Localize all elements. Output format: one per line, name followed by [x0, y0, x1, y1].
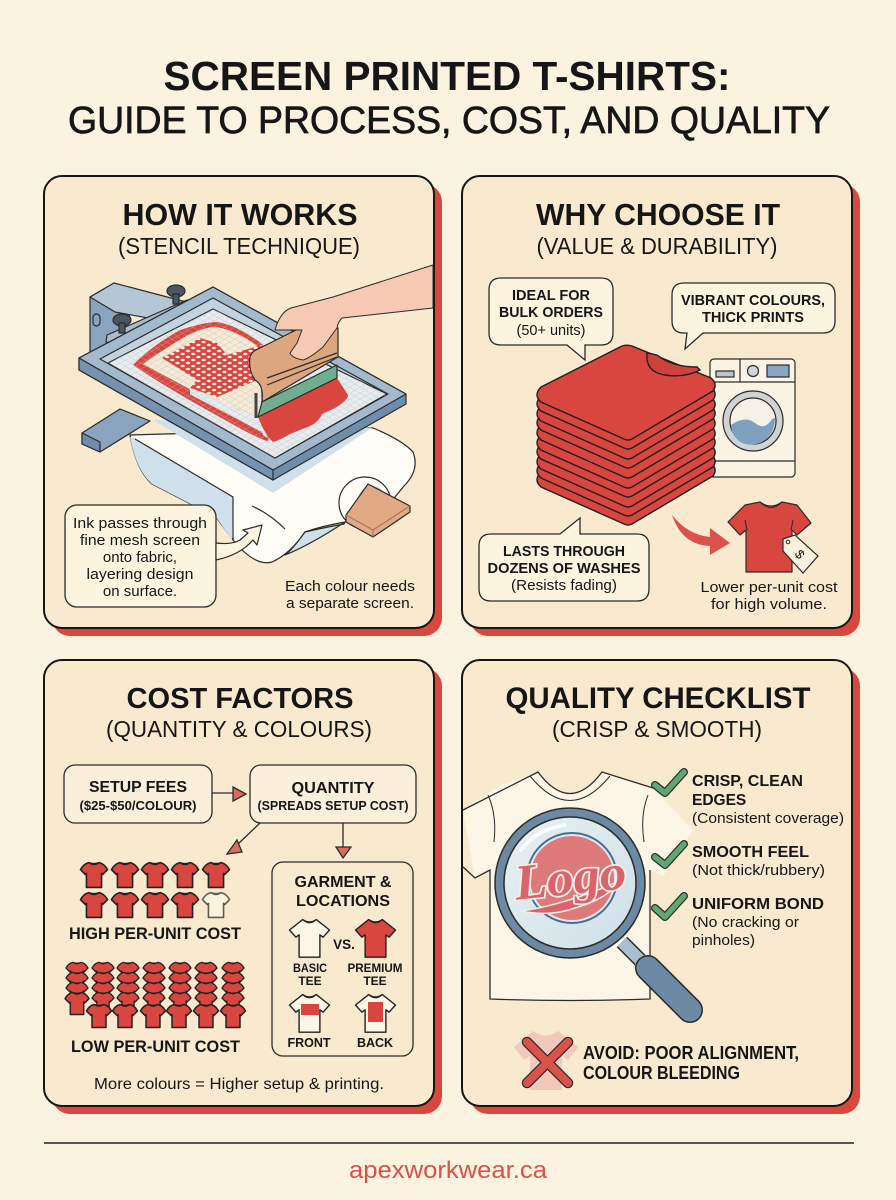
note: each colour: a separate screen.: [286, 595, 414, 612]
box: quantity: QUANTITY: [292, 780, 375, 797]
note: each colour: Each colour needs: [285, 578, 415, 595]
note: lower per-unit cost: for high volume.: [711, 596, 827, 613]
premium tee label line two: TEE: [363, 974, 387, 988]
heading: how it works: [118, 197, 360, 259]
icon: avoid crossed tee: [514, 1031, 578, 1090]
basic tee label line two: TEE: [298, 974, 322, 988]
note: each colour: [285, 578, 415, 612]
text: smooth feel: [692, 844, 825, 879]
title: [68, 53, 830, 142]
logo: [510, 833, 629, 923]
callout: ink passes through: on surface.: [103, 583, 177, 600]
text: smooth feel: (Not thick/rubbery): [692, 863, 825, 879]
icon: back print tee: [356, 995, 396, 1032]
note: lower per-unit cost: [700, 579, 838, 613]
heading: cost factors: (QUANTITY & COLOURS): [106, 716, 372, 742]
illustration: white tee: [463, 772, 693, 1000]
text: uniform bond: pinholes): [692, 933, 755, 949]
illustration: screen printing press: [79, 265, 433, 563]
heading: quality checklist: QUALITY CHECKLIST: [506, 682, 810, 715]
check: smooth feel: [655, 844, 684, 865]
icon: front print tee: [290, 995, 330, 1032]
box: garment and locations: LOCATIONS: [296, 893, 390, 910]
arrow: quantity to garment: [336, 823, 351, 858]
heading: quality checklist: [506, 682, 810, 742]
text: crisp edges: EDGES: [692, 792, 746, 809]
vs: VS.: [333, 937, 355, 952]
callout: ink passes through: layering design: [86, 566, 194, 583]
arrow: setup to quantity: [212, 787, 246, 801]
text: crisp edges: (Consistent coverage): [692, 811, 844, 827]
panel: why choose it: [462, 176, 860, 636]
basic tee label: BASIC: [293, 961, 327, 975]
callout: vibrant colours: [672, 283, 835, 349]
icon: priced red tee: [728, 502, 818, 573]
illustration: stack of red t-shirts: [537, 345, 715, 525]
icon: premium tee: [356, 920, 396, 957]
callout: vibrant colours: THICK PRINTS: [702, 309, 804, 326]
panel: cost factors: [44, 660, 442, 1114]
callout: vibrant colours: VIBRANT COLOURS,: [681, 292, 825, 309]
callout: ideal for bulk orders: (50+ units): [517, 323, 585, 339]
box: garment and locations: GARMENT &: [294, 874, 392, 891]
premium tee label: PREMIUM: [348, 961, 402, 975]
text: uniform bond: [692, 896, 824, 949]
icon: basic tee: [290, 920, 330, 957]
box: setup fees: [64, 765, 212, 823]
text: avoid: COLOUR BLEEDING: [583, 1063, 740, 1083]
shirt on platen: [130, 420, 415, 563]
arrow: to lower cost tee: [672, 515, 730, 555]
heading: how it works: HOW IT WORKS: [122, 197, 358, 232]
callout: lasts through washes: LASTS THROUGH: [503, 543, 625, 560]
check: uniform bond: [655, 896, 684, 917]
text: uniform bond: UNIFORM BOND: [692, 896, 824, 913]
heading: why choose it: WHY CHOOSE IT: [536, 197, 780, 232]
callout: ink passes through: fine mesh screen: [80, 532, 200, 549]
text: uniform bond: (No cracking or: [692, 915, 799, 931]
note: lower per-unit cost: Lower per-unit cost: [700, 579, 838, 596]
box: setup fees: ($25-$50/COLOUR): [80, 799, 196, 813]
title: SCREEN PRINTED T-SHIRTS:: [164, 53, 730, 99]
front label: FRONT: [287, 1036, 331, 1050]
screen frame: [79, 287, 406, 480]
box: quantity: (SPREADS SETUP COST): [258, 799, 408, 813]
box: garment and locations: [272, 862, 413, 1056]
panel: quality checklist: [462, 660, 860, 1114]
callout: ideal for bulk orders: [489, 278, 613, 360]
label: low per-unit cost: LOW PER-UNIT COST: [71, 1037, 241, 1056]
hand and squeegee: [250, 265, 433, 418]
heading: how it works: (STENCIL TECHNIQUE): [118, 233, 360, 259]
back label: BACK: [357, 1036, 393, 1050]
icon: magnifying glass with logo: [495, 808, 690, 1010]
callout: lasts through washes: [479, 518, 649, 601]
arrow: quantity to per-unit: [227, 823, 260, 854]
clamp and arm: [82, 283, 193, 452]
text: avoid: AVOID: POOR ALIGNMENT,: [583, 1043, 799, 1063]
text: crisp edges: CRISP, CLEAN: [692, 773, 803, 790]
label: high per-unit cost: HIGH PER-UNIT COST: [69, 924, 242, 943]
icons: many tees grid: [65, 962, 246, 1028]
arrow: [216, 525, 262, 560]
text: avoid: [583, 1043, 799, 1083]
callout: ink passes through: [65, 505, 262, 607]
illustration: washing machine: [710, 359, 795, 477]
logo: Logo: [510, 843, 629, 911]
callout: ideal for bulk orders: IDEAL FOR: [512, 287, 590, 304]
heading: quality checklist: (CRISP & SMOOTH): [552, 716, 762, 742]
text: smooth feel: SMOOTH FEEL: [692, 844, 809, 861]
icons: few tees grid: [80, 863, 230, 917]
check: crisp edges: [655, 772, 684, 793]
ink and stencil: [108, 309, 387, 458]
icon: priced red tee: $: [792, 547, 808, 562]
heading: cost factors: [106, 683, 372, 742]
callout: ideal for bulk orders: BULK ORDERS: [499, 304, 603, 321]
callout: ink passes through: Ink passes through: [73, 515, 207, 532]
note: more colours: More colours = Higher setup & printing.: [94, 1076, 384, 1093]
footer url: apexworkwear.ca: [349, 1157, 548, 1184]
heading: why choose it: [536, 197, 780, 259]
title: GUIDE TO PROCESS, COST, AND QUALITY: [68, 100, 830, 142]
heading: cost factors: COST FACTORS: [126, 683, 354, 715]
callout: lasts through washes: (Resists fading): [511, 578, 617, 594]
box: setup fees: SETUP FEES: [89, 779, 187, 796]
box: quantity: [250, 765, 416, 823]
callout: ink passes through: onto fabric,: [103, 549, 177, 566]
text: crisp edges: [692, 773, 844, 827]
heading: why choose it: (VALUE & DURABILITY): [536, 233, 778, 259]
panel: how it works: [44, 176, 442, 636]
callout: lasts through washes: DOZENS OF WASHES: [488, 560, 640, 577]
